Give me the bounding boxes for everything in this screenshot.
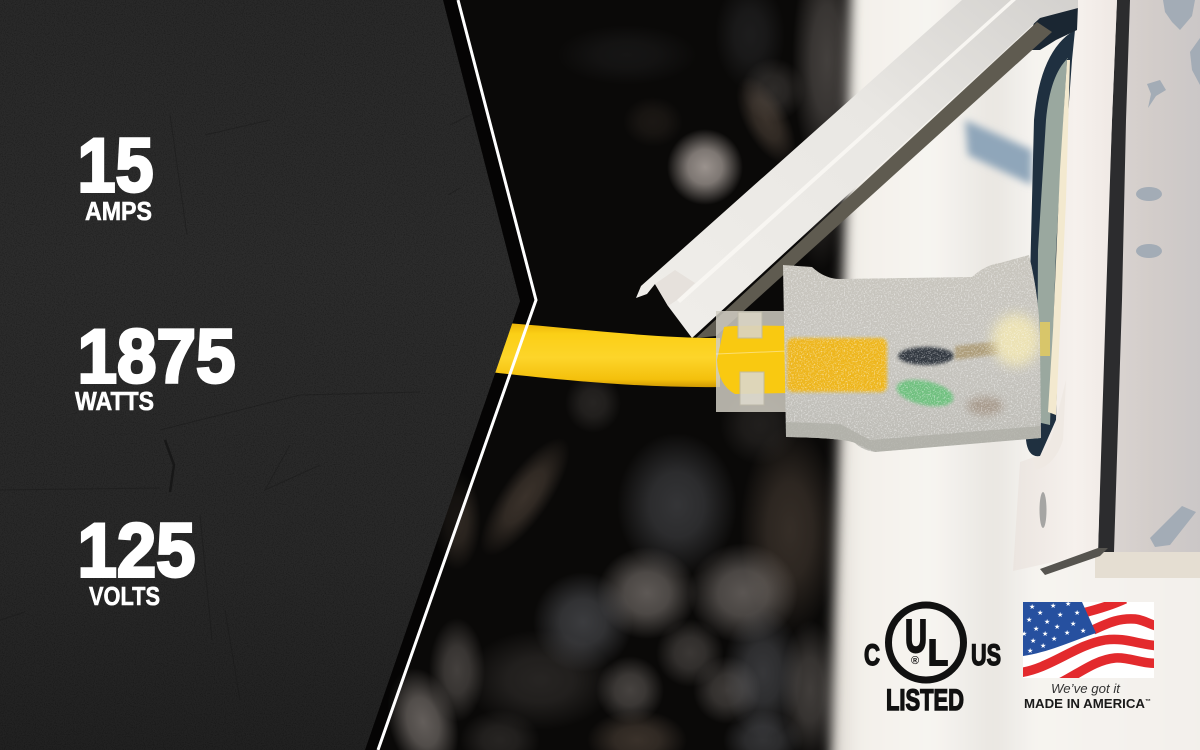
American flag: ★: [1030, 637, 1036, 645]
black wire: [898, 347, 954, 365]
UL listed logo: L: [928, 632, 948, 673]
stat: 15 amps: AMPS: [85, 196, 152, 226]
outlet cover plate: [1013, 0, 1117, 575]
American flag: ★: [1021, 630, 1027, 638]
American flag: ★: [1042, 630, 1048, 638]
blurred blue streak: [965, 120, 1032, 185]
American flag: ★: [1040, 642, 1046, 650]
American flag: ★: [1054, 623, 1060, 631]
white chevron line: [378, 0, 536, 750]
American flag: ★: [1074, 609, 1080, 617]
made in america tagline: We’ve got it: [1051, 681, 1121, 696]
outlet opening: [1026, 30, 1075, 456]
stat: 1875 watts: WATTS: [75, 386, 154, 416]
American flag: ★: [1065, 600, 1071, 608]
white wall: [830, 0, 1200, 750]
American flag: ★: [1057, 611, 1063, 619]
made in america tagline: [1024, 681, 1151, 711]
American flag: ★: [1050, 602, 1056, 610]
American flag: ★: [1044, 618, 1050, 626]
blurred bright spot: [667, 129, 743, 205]
outlet box and gap: [1095, 0, 1200, 578]
American flag: ★: [1064, 629, 1070, 637]
American flag: ★: [1026, 616, 1032, 624]
flap underside: [696, 22, 1052, 338]
American flag: ★: [1027, 647, 1033, 655]
UL listed logo: LISTED: [886, 684, 964, 717]
UL listed logo: US: [971, 639, 1001, 672]
American flag: [1023, 602, 1154, 678]
stat: 125 volts: VOLTS: [89, 581, 160, 611]
American flag: ★: [1070, 620, 1076, 628]
made in america tagline: MADE IN AMERICA: [1024, 696, 1146, 711]
blurred dark background: [376, 0, 862, 750]
green wire: [894, 378, 956, 408]
plug connector: [716, 250, 1045, 455]
American flag: ★: [1037, 609, 1043, 617]
gap behind flap: [1025, 5, 1078, 50]
clear cover flap: [636, 0, 1078, 338]
band behind panel: [365, 0, 537, 750]
panel grunge texture: [0, 0, 540, 750]
made in america tagline: ™: [1145, 698, 1151, 705]
stat: 15 amps: 15: [78, 124, 154, 208]
dark panel: [0, 0, 540, 750]
clear collar: [716, 311, 788, 412]
American flag: ★: [1033, 625, 1039, 633]
yellow cable: [490, 322, 720, 387]
UL listed logo: C: [864, 639, 880, 672]
American flag: ★: [1080, 627, 1086, 635]
American flag: ★: [1029, 603, 1035, 611]
paint chips on box: [1136, 0, 1200, 547]
American flag: ★: [1051, 635, 1057, 643]
UL listed logo: [864, 605, 1001, 717]
UL listed logo: ®: [911, 655, 919, 667]
plug body: [780, 250, 1045, 455]
UL listed logo: U: [905, 610, 927, 662]
stat: 1875 watts: 1875: [78, 314, 236, 400]
stat: 125 volts: 125: [78, 508, 196, 594]
